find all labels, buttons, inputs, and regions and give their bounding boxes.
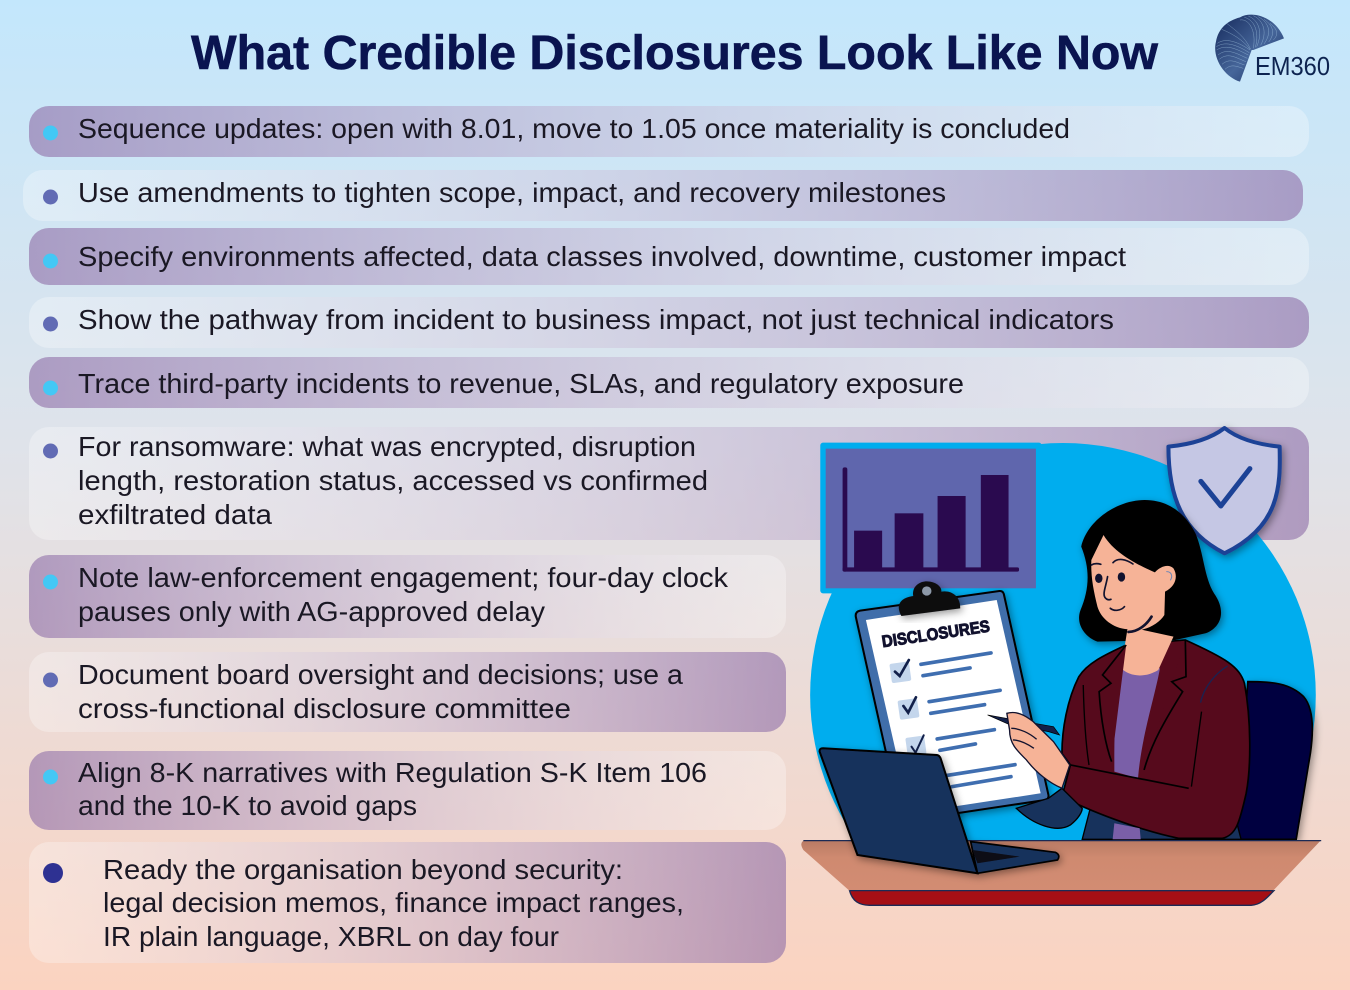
text: Ready the organisation beyond security: (103, 854, 623, 885)
facial features (1091, 559, 1172, 632)
text: Trace third-party incidents to revenue, SLAs, and regulatory exposure (78, 368, 964, 399)
bullet (43, 190, 58, 204)
text: Sequence updates: open with 8.01, move to 1.05 once materiality is concluded (78, 113, 1070, 144)
panel: amendments (23, 170, 1303, 221)
text (78, 431, 708, 530)
clipboard clip (899, 581, 960, 616)
lapels (1099, 640, 1186, 770)
panel: align narratives (29, 751, 786, 830)
text: cross-functional disclosure committee (78, 693, 571, 724)
logo: EM360: EM360 (1255, 51, 1330, 81)
text (78, 562, 729, 627)
bullet (43, 863, 63, 883)
forearm (1070, 765, 1189, 788)
chart: bar chart panel (820, 443, 1042, 593)
jacket (1062, 640, 1250, 838)
chair (1236, 682, 1312, 839)
panel: sequence updates (29, 106, 1309, 157)
blue circle backdrop (810, 443, 1316, 840)
bullet (43, 316, 58, 332)
pen (988, 715, 1060, 735)
lower torso (1082, 807, 1241, 839)
laptop (820, 748, 1059, 873)
title: What Credible Disclosures Look Like Now (191, 27, 1159, 80)
panel: third-party (29, 357, 1309, 408)
text (78, 659, 683, 724)
illustration: woman reviewing disclosures (801, 428, 1321, 947)
neck and face (1121, 627, 1173, 675)
panel: pathway (29, 297, 1309, 348)
bullet (43, 672, 58, 688)
text: pauses only with AG-approved delay (78, 596, 545, 627)
desk (801, 840, 1321, 905)
text (103, 854, 684, 952)
hand (1007, 713, 1070, 788)
text: exfiltrated data (78, 499, 272, 530)
icon: shield (1168, 428, 1280, 553)
text: and the 10-K to avoid gaps (78, 790, 417, 821)
bullet (43, 444, 58, 458)
bullet (43, 574, 58, 590)
panel: law enforcement (29, 555, 786, 638)
text (78, 757, 707, 821)
text: length, restoration status, accessed vs confirmed (78, 465, 708, 496)
logo: EM360 (1215, 15, 1330, 82)
panel: ransomware (29, 427, 1309, 540)
text: For ransomware: what was encrypted, disruption (78, 431, 696, 462)
bullet (43, 770, 58, 784)
text: Show the pathway from incident to business impact, not just technical indicators (78, 304, 1114, 335)
text: Note law-enforcement engagement; four-day clock (78, 562, 729, 593)
clipboard (856, 581, 1049, 822)
text: legal decision memos, finance impact ranges, (103, 887, 684, 918)
text: Align 8-K narratives with Regulation S-K Item 106 (78, 757, 707, 788)
checklist (889, 653, 1015, 787)
panel: specify environments (29, 228, 1309, 285)
text: Specify environments affected, data classes involved, downtime, customer impact (78, 241, 1126, 272)
text: IR plain language, XBRL on day four (103, 921, 559, 952)
text: Use amendments to tighten scope, impact, and recovery milestones (78, 177, 946, 208)
clipboard heading: DISCLOSURES (881, 617, 991, 651)
hair (1079, 500, 1221, 642)
bullet (43, 254, 58, 268)
woman (988, 500, 1250, 839)
bullet (43, 126, 58, 140)
panel: ready the organisation (29, 842, 786, 963)
panel: board oversight (29, 652, 786, 732)
shirt (1114, 668, 1160, 778)
text: Document board oversight and decisions; use a (78, 659, 683, 690)
bullet (43, 380, 58, 396)
